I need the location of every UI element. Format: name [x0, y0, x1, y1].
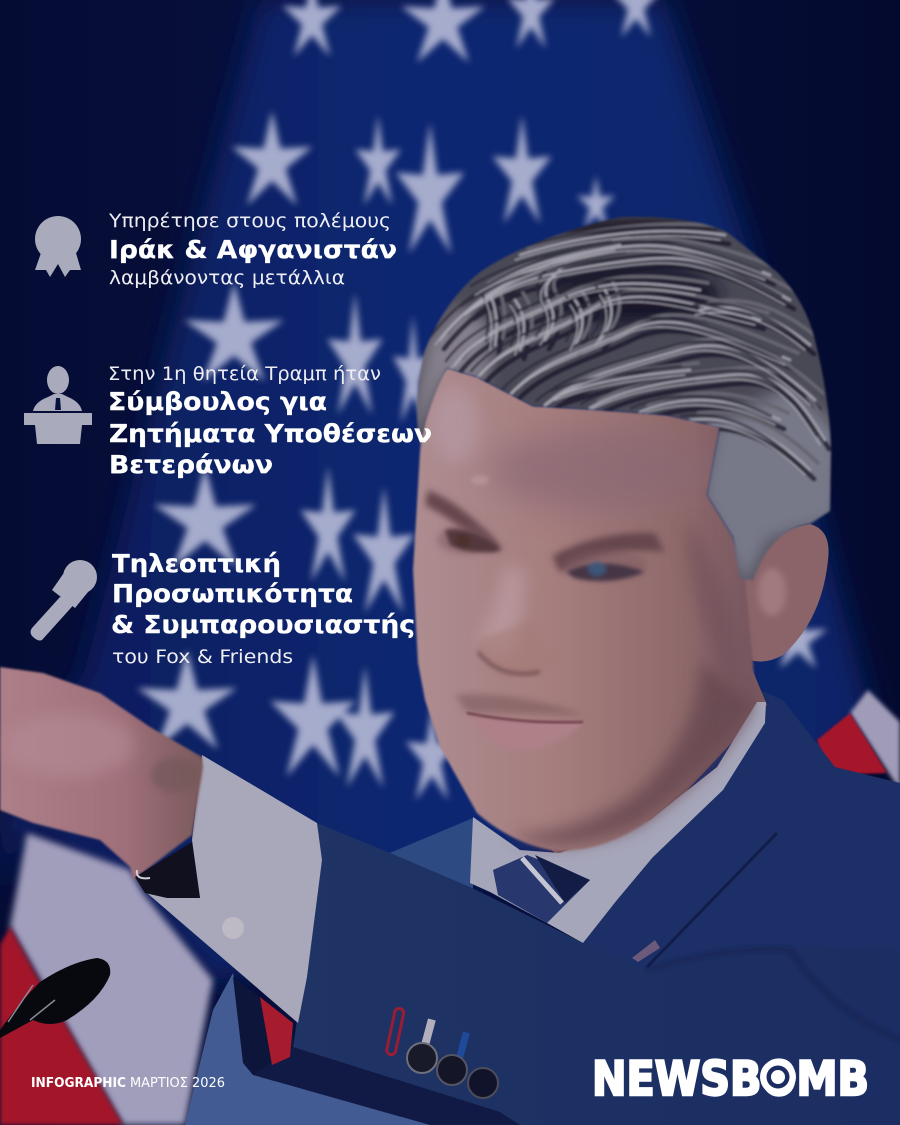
flag: white stripe left: [10, 833, 213, 1125]
person: jacket sleeve: [293, 823, 900, 1125]
person: jacket lining: [233, 977, 293, 1075]
item 1: military service: [35, 210, 397, 289]
flag: white stripe right: [850, 690, 900, 790]
person: nose bridge highlight: [478, 565, 525, 656]
person: chest and right shoulder: [583, 690, 900, 975]
text: TV personality: του Fox & Friends: [112, 646, 293, 668]
text: service in wars: Υπηρέτησε στους πολέμους: [108, 210, 391, 232]
person: sleeve buttons: [386, 1008, 498, 1098]
flag: red stripe right: [817, 713, 887, 775]
icon: speaker at podium: [24, 366, 92, 444]
text: service in wars: λαμβάνοντας μετάλλια: [109, 267, 345, 289]
person: nose shadow line: [478, 652, 540, 674]
person: hair base: [417, 217, 831, 580]
person: watch: [135, 842, 200, 898]
person: shirt cuff: [147, 755, 322, 1023]
footer label: ΜΑΡΤΙΟΣ 2026: [130, 1076, 225, 1091]
person: watch band edge: [137, 870, 150, 878]
person: temple highlight: [431, 387, 479, 463]
text: adviser role: [108, 363, 432, 479]
item 2: adviser: [24, 363, 432, 479]
person: mouth line: [467, 713, 583, 722]
person: cuff button: [222, 917, 244, 939]
flag: red stripe left: [0, 927, 123, 1125]
person: forehead bump: [471, 475, 489, 485]
person: cheek side shadow: [685, 520, 741, 700]
text: TV personality: [111, 549, 415, 668]
text: service in wars: [108, 210, 397, 289]
person: neck: [490, 640, 767, 858]
person: jaw shadow: [510, 660, 755, 845]
text: TV personality: & Συμπαρουσιαστής: [111, 610, 415, 639]
person: lapel line: [647, 833, 777, 967]
person: red lining: [260, 997, 293, 1065]
person: brows: [425, 490, 665, 572]
person: hair: [410, 217, 840, 590]
text: adviser role: Ζητήματα Υποθέσεων: [109, 419, 432, 448]
icon: medal: [35, 216, 81, 277]
text: TV personality: Προσωπικότητα: [112, 579, 353, 608]
person: tie: [493, 855, 590, 923]
person: lips: [470, 715, 583, 750]
person: tie light stripe: [522, 858, 562, 903]
person: tie dark stripe: [535, 855, 590, 903]
person: grey side hair: [706, 386, 832, 580]
person: inner ear: [758, 568, 786, 616]
person: ear: [735, 524, 829, 662]
person: hair detail clipped to head: [410, 218, 840, 590]
person: dark crown: [550, 265, 720, 325]
logo: Newsbomb: NEWSBOMB: [592, 1052, 869, 1107]
person: forehead shadow: [490, 430, 710, 510]
person: upper lip shade: [455, 694, 585, 715]
person: eye shadows: [437, 526, 647, 581]
person: nose: [477, 620, 557, 678]
person: lapel pin: [632, 940, 660, 962]
person: top dark band: [560, 218, 720, 238]
person: grey temple: [416, 300, 498, 434]
text: service in wars: Ιράκ & Αφγανιστάν: [109, 235, 397, 264]
person: hand: [0, 667, 203, 880]
person: face: [413, 368, 755, 851]
person: wrist hair: [151, 757, 199, 793]
person: sleeve hem: [253, 1047, 520, 1125]
text: TV personality: Τηλεοπτική: [112, 549, 281, 578]
text: adviser role: Βετεράνων: [109, 450, 273, 479]
text: adviser role: Στην 1η θητεία Τραμπ ήταν: [108, 363, 381, 385]
person: sleeve fold: [647, 949, 900, 1040]
footer label: INFOGRAPHIC: [31, 1076, 126, 1091]
item 3: television: [30, 549, 415, 668]
icon: reporter microphone: [30, 560, 97, 640]
person: hair strands: [431, 224, 833, 479]
microphone in foreground: [0, 958, 110, 1038]
person: eyes: [445, 529, 645, 581]
person: hand highlight: [5, 713, 135, 777]
person: shirt collar: [470, 702, 766, 943]
footer label: [31, 1076, 225, 1091]
text: adviser role: Σύμβουλος για: [108, 387, 327, 416]
flag: stars: [137, 0, 828, 801]
person: left jacket shoulder: [385, 818, 473, 890]
person: lower jacket: [185, 973, 510, 1125]
